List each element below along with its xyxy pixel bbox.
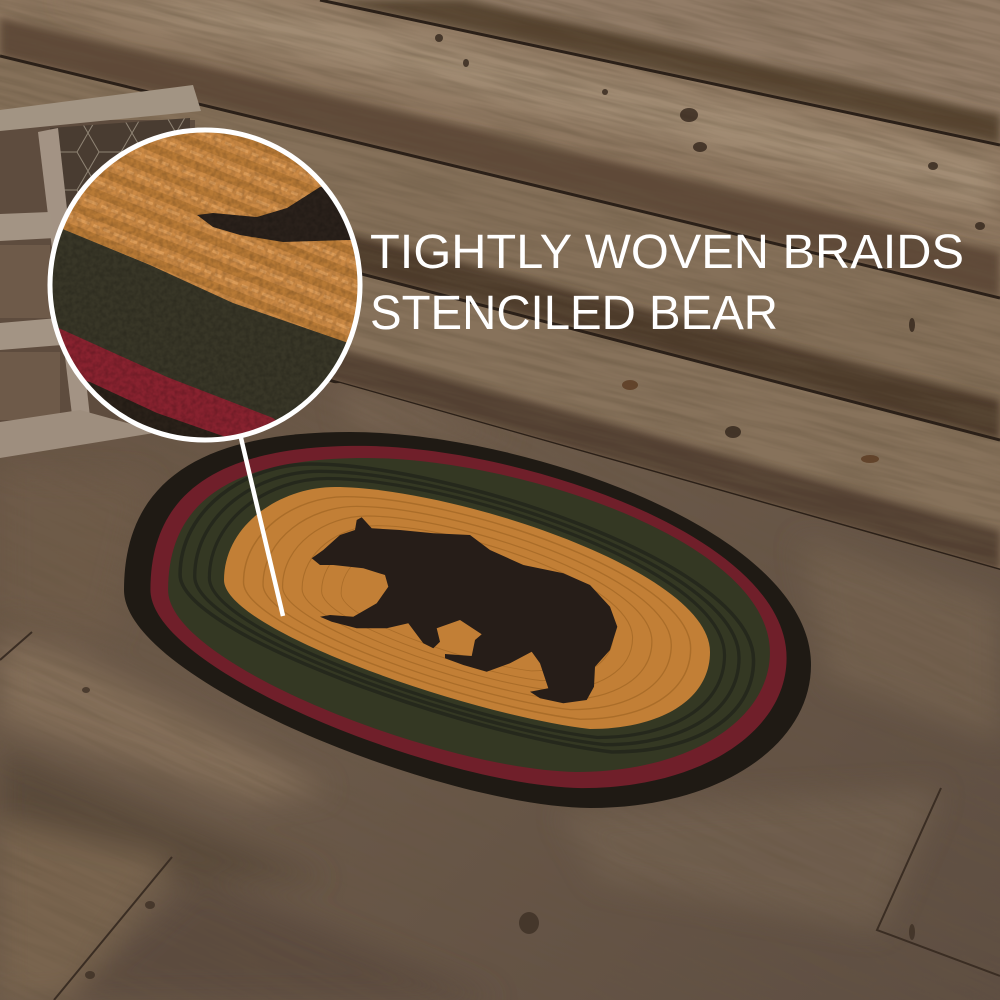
second log	[0, 0, 1000, 243]
crate back	[0, 120, 195, 440]
rug outer black border	[124, 432, 811, 808]
third log	[1, 58, 998, 300]
bear silhouette	[312, 517, 617, 703]
magnifier pointer line	[241, 438, 283, 616]
magnified green band	[52, 229, 346, 420]
gaps between logs	[0, 0, 1000, 570]
fourth log	[362, 276, 1000, 444]
floor colour patches	[0, 390, 1000, 1000]
top log	[320, 0, 1000, 145]
crate compartment lights	[0, 245, 60, 420]
magnified dark band	[86, 381, 224, 438]
magnified bear detail	[197, 186, 351, 242]
green band rings	[180, 464, 754, 752]
caption: TIGHTLY WOVEN BRAIDS	[370, 226, 964, 279]
crate bottom rail	[0, 410, 160, 458]
magnified red band	[58, 328, 276, 436]
floor knots	[82, 687, 915, 979]
background: log wall	[0, 0, 1000, 600]
rug green band	[168, 458, 770, 772]
caption	[370, 226, 964, 340]
crate post	[38, 128, 92, 440]
crate wire panel	[50, 118, 190, 230]
floor board seams	[0, 632, 1000, 1000]
wall knots	[435, 34, 985, 463]
crate shelves	[0, 212, 62, 350]
orange braid rings	[244, 497, 691, 719]
rug red band	[150, 446, 787, 788]
magnified orange braids	[63, 132, 358, 342]
braided oval rug with bear silhouette	[124, 432, 811, 808]
caption: STENCILED BEAR	[370, 287, 778, 340]
wall grain	[0, 0, 1000, 493]
rug orange center	[224, 487, 710, 729]
crate top rail	[0, 85, 201, 131]
magnifier close-up of the braids	[50, 130, 360, 440]
wooden crate	[0, 85, 201, 458]
